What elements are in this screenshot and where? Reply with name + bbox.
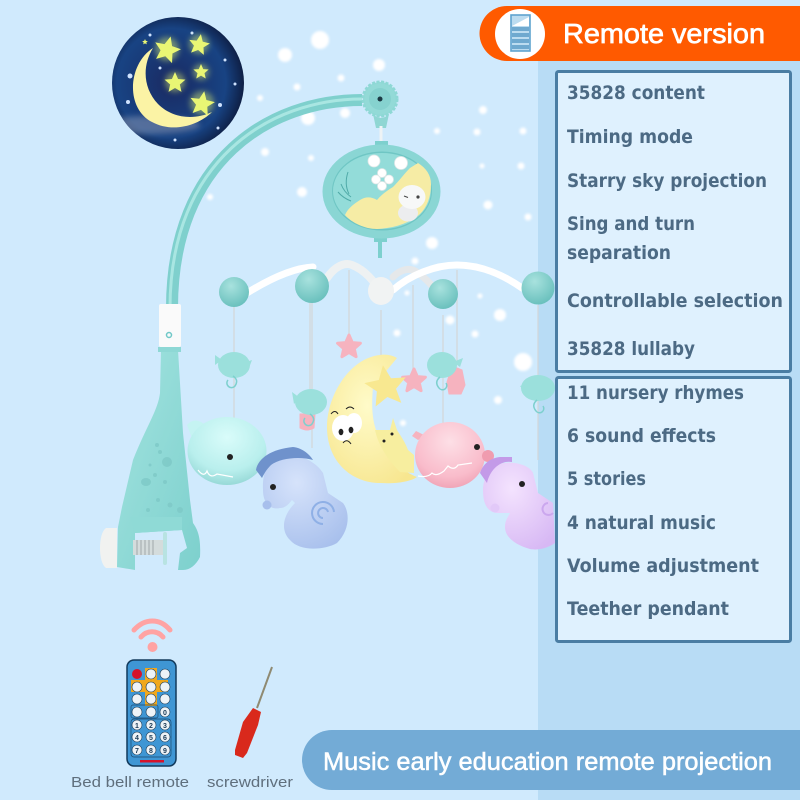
label: remote: Bed bell remote [71, 774, 189, 791]
bunny on moon [375, 418, 414, 473]
teal balls [219, 269, 554, 309]
battery remote icon [495, 9, 545, 59]
clamp knob [100, 528, 117, 568]
pink whale [412, 422, 494, 488]
blue whale [187, 417, 266, 485]
panel: features lower: 4 natural music [567, 512, 716, 534]
remote control: 8 [149, 748, 153, 755]
cloud [345, 163, 431, 229]
curved arm [172, 100, 362, 308]
clamp screw [133, 540, 163, 555]
buttons [368, 155, 408, 190]
yellow crescent moon [327, 355, 417, 483]
banner title: Remote version [563, 18, 765, 49]
panel: features lower: 5 stories [567, 468, 646, 490]
icon: wifi signal [134, 621, 170, 652]
panel: features lower: Teether pendant [567, 598, 729, 620]
panel: features lower: Volume adjustment [567, 555, 759, 577]
moon and stars projection badge [100, 17, 244, 149]
remote control: 7 [135, 748, 139, 755]
screwdriver [235, 667, 272, 758]
remote control [127, 660, 176, 766]
arm hub [373, 114, 389, 128]
remote control: 6 [163, 735, 167, 742]
hanging strings [234, 270, 538, 460]
remote control: 3 [163, 723, 167, 730]
label: screwdriver: screwdriver [207, 774, 293, 791]
music box [322, 126, 440, 258]
white crossbar [247, 264, 522, 305]
purple seahorse [480, 457, 555, 549]
panel: features upper: Sing and turn [567, 213, 695, 235]
panel: features upper: Starry sky projection [567, 170, 767, 192]
teal birds [215, 352, 555, 426]
orange title banner [480, 6, 800, 61]
remote control: 4 [135, 735, 139, 742]
panel: features upper: 35828 lullaby [567, 338, 696, 360]
panel: features upper: separation [567, 242, 671, 264]
panel: features lower [556, 378, 790, 642]
remote control: 2 [149, 723, 153, 730]
remote control: 0 [163, 710, 167, 717]
blue seahorse [256, 447, 348, 549]
panel: features lower: 11 nursery rhymes [567, 382, 744, 404]
panel: features upper: Controllable selection [567, 290, 783, 312]
panel: features upper [556, 72, 790, 372]
mobile arm and clamp [100, 82, 397, 570]
clamp body [117, 350, 200, 570]
pink stars [300, 335, 465, 430]
remote control: 9 [163, 748, 167, 755]
panel: features upper: 35828 content [567, 82, 705, 104]
panel: features upper: Timing mode [567, 126, 693, 148]
bottom caption pill: Music early education remote projection [323, 748, 772, 776]
white collar [159, 304, 181, 347]
rabbit [398, 185, 426, 222]
panel: features lower: 6 sound effects [567, 425, 716, 447]
remote control: 5 [149, 735, 153, 742]
remote control: 1 [135, 723, 139, 730]
sparkle stars background [207, 31, 532, 426]
bottom caption pill [302, 730, 800, 790]
